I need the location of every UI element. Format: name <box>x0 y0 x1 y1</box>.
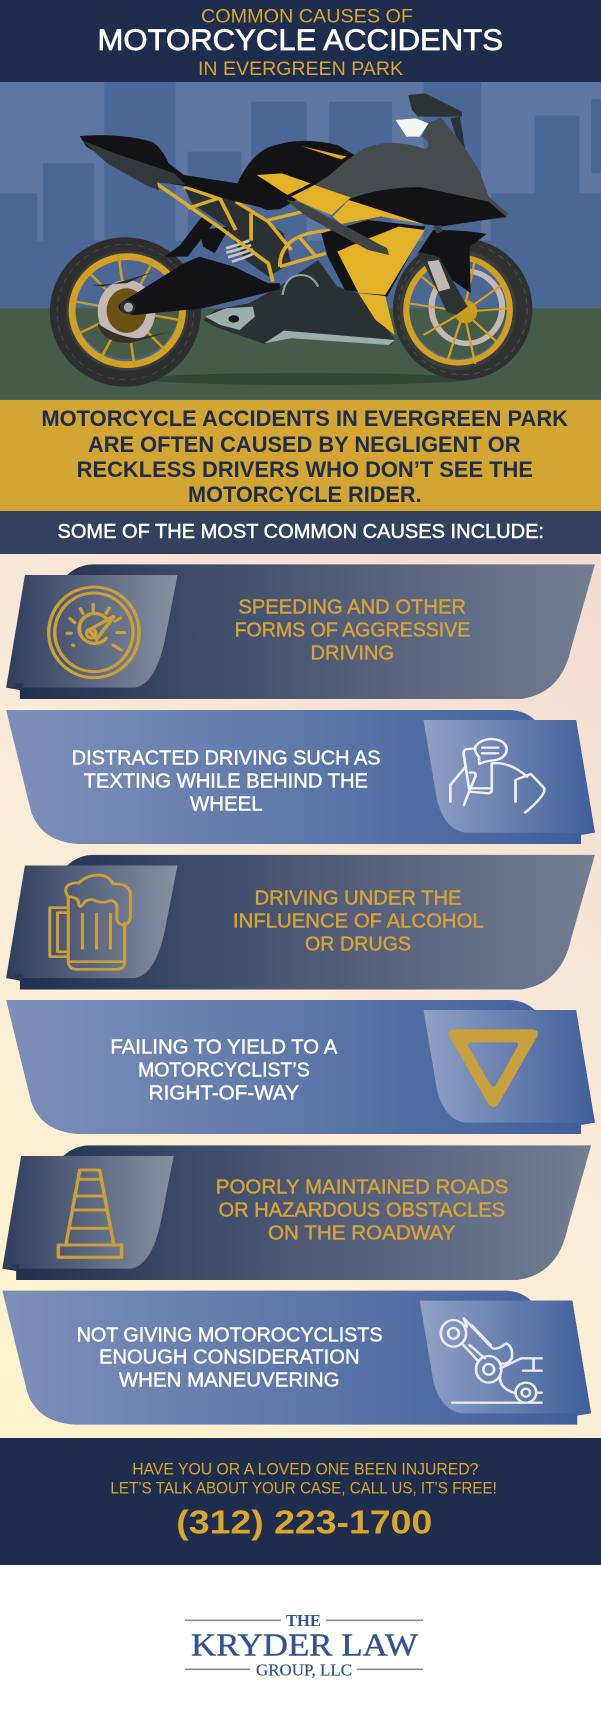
text: DRIVING <box>310 643 394 665</box>
text: RIGHT-OF-WAY <box>149 1083 299 1105</box>
text <box>233 888 484 956</box>
panel: not giving consideration <box>2 1291 591 1425</box>
text: OR HAZARDOUS OBSTACLES <box>218 1200 505 1222</box>
gold intro band <box>0 400 601 511</box>
text: DRIVING UNDER THE <box>254 888 462 910</box>
text: MOTORCYCLIST’S <box>138 1060 310 1082</box>
text <box>216 1177 508 1245</box>
gold fairing panels <box>257 173 425 335</box>
title: MOTORCYCLE ACCIDENTS <box>98 24 503 57</box>
intro text: MOTORCYCLE ACCIDENTS IN EVERGREEN PARK <box>41 406 568 431</box>
belly pan <box>203 260 395 345</box>
logo: The Kryder Law Group <box>185 1611 423 1680</box>
phone number: (312) 223-1700 <box>176 1503 432 1540</box>
logo: The Kryder Law Group: KRYDER LAW <box>191 1627 419 1663</box>
text: WHEN MANEUVERING <box>119 1370 340 1392</box>
icon: yield sign <box>449 1029 538 1107</box>
front wheel <box>393 239 532 380</box>
call to action text <box>110 1459 497 1497</box>
text <box>110 1037 338 1105</box>
intro text: RECKLESS DRIVERS WHO DON’T SEE THE <box>77 457 533 482</box>
text: INFLUENCE OF ALCOHOL <box>233 911 484 933</box>
icon: speedometer <box>49 587 139 678</box>
front fender and fork <box>418 230 487 293</box>
icon: traffic cone <box>58 1170 122 1257</box>
motorcycle <box>50 93 532 387</box>
header line: in Evergreen Park: IN EVERGREEN PARK <box>198 58 403 80</box>
text: TEXTING WHILE BEHIND THE <box>84 770 368 792</box>
intro text: ARE OFTEN CAUSED BY NEGLIGENT OR <box>88 432 521 457</box>
text <box>77 1324 382 1392</box>
call to action text: HAVE YOU OR A LOVED ONE BEEN INJURED? <box>132 1459 478 1478</box>
exhaust arc <box>282 275 318 295</box>
rear struts and shock <box>157 187 291 277</box>
headlight <box>396 118 429 137</box>
panel: poorly maintained roads <box>2 1145 591 1280</box>
text: NOT GIVING MOTOROCYCLISTS <box>77 1324 382 1346</box>
rear wheel <box>50 237 201 387</box>
sub-heading band: SOME OF THE MOST COMMON CAUSES INCLUDE: <box>58 521 544 543</box>
gold trellis frame <box>155 183 337 282</box>
fairing grey <box>307 117 508 225</box>
tank <box>238 141 355 210</box>
sub-heading band <box>0 511 601 554</box>
illustration: motorcycle scene <box>0 82 601 400</box>
call to action text: LET’S TALK ABOUT YOUR CASE, CALL US, IT’S FREE! <box>110 1478 497 1497</box>
text: DISTRACTED DRIVING SUCH AS <box>72 747 381 769</box>
text <box>235 597 470 665</box>
intro text <box>41 406 568 507</box>
text: POORLY MAINTAINED ROADS <box>216 1177 508 1199</box>
logo: The Kryder Law Group: GROUP, LLC <box>256 1661 352 1680</box>
icon: texting hands <box>450 739 544 813</box>
panel: alcohol or drugs <box>6 855 595 989</box>
text: OR DRUGS <box>305 934 411 956</box>
text: SPEEDING AND OTHER <box>238 597 466 619</box>
text: ON THE ROADWAY <box>268 1223 455 1245</box>
header line: common causes of: COMMON CAUSES OF <box>201 6 413 28</box>
icon: motorcycle crash <box>441 1318 542 1403</box>
call to action band <box>0 1438 601 1565</box>
causes background <box>0 554 601 1438</box>
intro text: MOTORCYCLE RIDER. <box>188 482 422 507</box>
city skyline background <box>0 82 601 400</box>
header band <box>0 0 601 82</box>
text: ENOUGH CONSIDERATION <box>99 1347 360 1369</box>
icon: beer mug <box>50 875 130 969</box>
logo: The Kryder Law Group: THE <box>286 1611 321 1630</box>
panel: failing to yield <box>6 1000 595 1134</box>
black side fairing <box>321 220 425 297</box>
panel: speeding <box>6 564 595 699</box>
text: FORMS OF AGGRESSIVE <box>235 620 470 642</box>
text: FAILING TO YIELD TO A <box>110 1037 338 1059</box>
silver panels <box>205 307 395 345</box>
dark fairing strip <box>286 199 389 255</box>
tail <box>80 135 264 208</box>
text <box>72 747 381 815</box>
text: WHEEL <box>190 793 263 815</box>
mirror <box>408 93 465 148</box>
swingarm <box>119 257 280 315</box>
panel: distracted driving <box>6 710 595 844</box>
